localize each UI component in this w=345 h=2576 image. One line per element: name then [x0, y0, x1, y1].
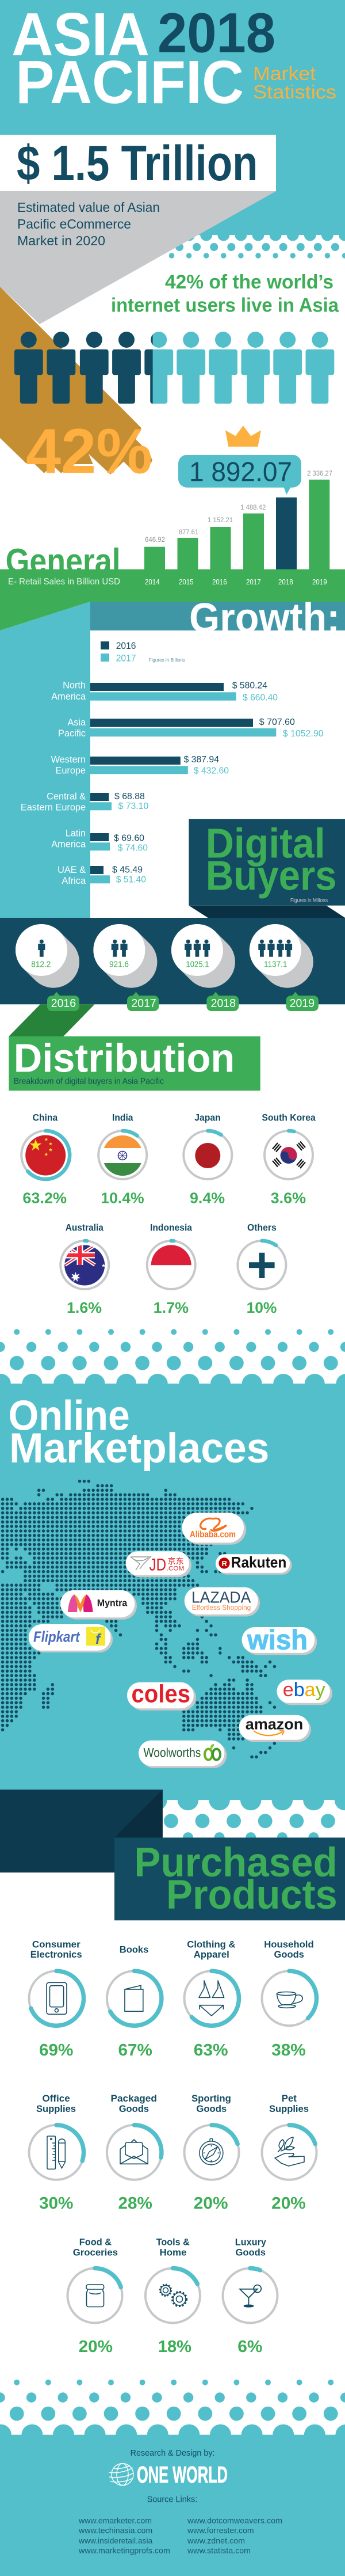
parallelogram under band [9, 1004, 95, 1036]
source links: www.marketingprofs.com [78, 2546, 170, 2555]
source links: www.zdnet.com [187, 2536, 245, 2545]
icon: bikini [199, 1981, 224, 2016]
item: books: Books [120, 1944, 148, 1955]
item: food and groceries: Groceries [73, 2247, 118, 2258]
item: food and groceries: Food & [79, 2236, 112, 2247]
icon: crown [225, 425, 261, 447]
year labels [145, 578, 327, 586]
buyers 2016: 812.2 [31, 959, 51, 969]
bars [144, 480, 329, 570]
item: household goods: Goods [274, 1949, 304, 1960]
title: Asia: ASIA [12, 1, 150, 69]
item: India: India [112, 1113, 133, 1123]
year pill 2018 [206, 992, 239, 1011]
region labels: Western [51, 754, 86, 765]
region labels: Europe [55, 765, 86, 776]
flag: China [25, 1135, 66, 1176]
description text [17, 200, 160, 248]
big 42 percent: 42% [26, 416, 152, 487]
bar values: 1 488.42 [240, 503, 266, 511]
item: South Korea: South Korea [262, 1113, 316, 1123]
year pill 2019: 2019 [290, 997, 315, 1010]
2017 values: $ 432.60 [194, 766, 229, 776]
badge: Myntra [60, 1590, 137, 1620]
badge: Lazada: LAZADA [191, 1588, 251, 1606]
2016 bars [90, 683, 253, 874]
item: tools and home [145, 2236, 200, 2356]
logo: One World [109, 2463, 228, 2488]
scallop and dot pattern [163, 1800, 345, 1838]
heading box [114, 1838, 345, 1920]
icon: hand and plant [275, 2137, 304, 2166]
2016 values: $ 580.24 [232, 681, 267, 691]
panel: header [0, 0, 345, 256]
bar chart: general e-retail sales [0, 469, 345, 630]
badge: Woolworths [139, 1741, 227, 1768]
badge: Alibaba [182, 1513, 246, 1545]
flag: Japan [195, 1143, 220, 1168]
item: luxury goods: Goods [236, 2247, 266, 2258]
title: Pacific: PACIFIC [16, 48, 244, 116]
item: sporting goods: Goods [196, 2103, 227, 2114]
subtitle: Market Statistics [253, 63, 336, 102]
item: Japan: 9.4% [190, 1189, 225, 1206]
item: Indonesia: 1.7% [154, 1299, 189, 1316]
heading band [90, 602, 345, 630]
heading: 42 percent of internet users [111, 271, 339, 317]
source links [78, 2516, 282, 2555]
icon: gears [160, 2285, 187, 2307]
item: office supplies: Office [43, 2093, 70, 2104]
item: pet supplies [262, 2093, 316, 2213]
item: books: 67% [118, 2041, 152, 2060]
description text: Market in 2020 [17, 233, 105, 248]
2017 values: $ 73.10 [118, 801, 148, 811]
heading: Growth: Growth: [189, 595, 340, 641]
badge: Myntra: Myntra [97, 1597, 128, 1608]
heading: Digital Buyers [206, 820, 337, 899]
source links: www.statista.com [187, 2546, 251, 2555]
badge: Woolworths: Woolworths [144, 1746, 201, 1760]
year pill 2019 [286, 992, 319, 1011]
item: consumer electronics: Consumer [32, 1939, 80, 1950]
item: household goods: 38% [271, 2041, 306, 2060]
2017 values: $ 51.40 [116, 875, 146, 884]
flag: India [103, 1135, 141, 1176]
item: packaged goods [107, 2093, 162, 2213]
year labels: 2019 [312, 578, 327, 586]
source links: www.techinasia.com [78, 2526, 152, 2535]
dark band [0, 918, 345, 1004]
dot pattern [0, 1332, 345, 1384]
item: South Korea: 3.6% [271, 1189, 306, 1206]
badge: eBay [277, 1679, 332, 1705]
item: clothing and apparel [184, 1939, 239, 2060]
heading: Online Marketplaces [8, 1392, 269, 1472]
item: luxury goods: Luxury [235, 2236, 267, 2247]
legend [101, 640, 185, 664]
icon: cocktail [240, 2285, 261, 2307]
heading: General: General [6, 542, 121, 580]
2016 values: $ 387.94 [184, 755, 219, 765]
item: clothing and apparel: Clothing & [187, 1939, 236, 1950]
band caption: E- Retail Sales in Billion USD [8, 577, 120, 587]
credit line: Research & Design by: [131, 2448, 215, 2458]
gray description panel [0, 191, 276, 324]
heading: 42 percent of internet users: internet users live in Asia [111, 295, 339, 317]
badge: JD [125, 1551, 191, 1578]
description text: Estimated value of Asian [17, 200, 160, 215]
heading box [9, 1036, 260, 1091]
badge: Rakuten: Rakuten [231, 1553, 286, 1571]
buyers 2019: 1137.1 [264, 959, 287, 969]
bar values: 1 152.21 [208, 516, 233, 524]
title: 2018: 2018 [158, 2, 275, 64]
item: pet supplies: Supplies [269, 2103, 309, 2114]
item: household goods: Household [264, 1939, 314, 1950]
heading: Online Marketplaces: Online [8, 1392, 130, 1439]
teal side column [0, 602, 90, 918]
year pill 2018: 2018 [211, 997, 236, 1010]
heading box [189, 819, 345, 906]
item: Australia [60, 1222, 109, 1316]
region labels: Central & [47, 791, 86, 801]
buyers 2018 [171, 924, 223, 976]
badge: Amazon [239, 1715, 311, 1742]
region labels: Africa [62, 876, 86, 886]
callout: 1 892.07 [178, 455, 301, 495]
year pill 2017: 2017 [131, 997, 156, 1010]
bar values: 2 336.27 [307, 469, 332, 477]
heading: Online Marketplaces: Marketplaces [9, 1425, 269, 1472]
year pill 2016 [47, 992, 79, 1011]
panel: growth [0, 595, 345, 918]
year labels: 2015 [179, 578, 194, 586]
sources heading: Source Links: [147, 2495, 197, 2505]
badge: Flipkart [29, 1624, 113, 1652]
logo: One World: ONE WORLD [137, 2463, 228, 2488]
scallop and dot pattern [171, 235, 345, 256]
heading: 42 percent of internet users: 42% of the world’s [165, 271, 334, 293]
year pill 2016: 2016 [51, 997, 76, 1010]
item: clothing and apparel: Apparel [194, 1949, 229, 1960]
item: luxury goods: 6% [237, 2338, 263, 2356]
region labels: Eastern Europe [21, 802, 86, 812]
region labels: UAE & [57, 865, 86, 875]
year labels: 2016 [212, 578, 227, 586]
panel: online marketplaces [0, 1332, 345, 1800]
legend: 2017 [116, 653, 136, 664]
heading: Digital Buyers: Buyers [206, 853, 337, 899]
region labels: America [51, 692, 86, 702]
item: China: 63.2% [22, 1189, 67, 1206]
green band [0, 569, 345, 630]
flag: Australia [64, 1245, 105, 1285]
box shadow [189, 906, 345, 918]
badge: Coles: coles [131, 1680, 190, 1708]
flag: South Korea [273, 1141, 305, 1168]
bar values [145, 469, 332, 544]
buyers 2017: 921.6 [109, 959, 129, 969]
bar values: 877.61 [179, 528, 198, 536]
badge: JD: .COM [167, 1566, 184, 1572]
badge: JD: 京东 [168, 1556, 184, 1567]
item: books [107, 1944, 162, 2060]
2016 values: $ 68.88 [114, 792, 145, 801]
heading: Purchased Products: Purchased [134, 1840, 338, 1886]
subtitle: Market Statistics: Statistics [253, 81, 336, 102]
item: office supplies: 30% [39, 2194, 74, 2213]
badge: JD: JD [150, 1556, 166, 1575]
item: South Korea [262, 1113, 316, 1206]
panel: distribution [9, 1036, 316, 1316]
panel: footer [0, 2383, 345, 2576]
2017 values [116, 693, 324, 884]
legend: 2016 [116, 640, 136, 651]
item: pet supplies: 20% [271, 2194, 306, 2213]
region labels: Asia [67, 717, 86, 728]
icon: phone [47, 1982, 67, 2014]
bar values: 646.92 [145, 535, 165, 544]
region labels: Latin [66, 828, 86, 838]
source links: www.insideretail.asia [78, 2536, 152, 2545]
icon: plus [249, 1253, 275, 1278]
buyers 2016 [0, 0, 67, 976]
item: tools and home: Home [160, 2247, 186, 2258]
source links: www.forrester.com [187, 2526, 254, 2535]
item: luxury goods [223, 2236, 277, 2356]
2016 values: $ 707.60 [259, 717, 295, 727]
buyers 2019 [250, 924, 301, 976]
item: packaged goods: Goods [119, 2103, 149, 2114]
year labels: 2017 [246, 578, 261, 586]
item: sporting goods: 20% [194, 2194, 228, 2213]
item: Australia: 1.6% [67, 1299, 102, 1316]
region labels: America [51, 839, 86, 849]
year labels: 2018 [278, 578, 293, 586]
subtitle: Market Statistics: Market [253, 63, 316, 84]
badge: Rakuten: R [222, 1559, 228, 1568]
item: Indonesia: Indonesia [150, 1222, 193, 1233]
2017 bars [90, 692, 276, 883]
pictogram: ten people [14, 332, 334, 404]
description text: Pacific eCommerce [17, 216, 131, 231]
icon: compass [200, 2138, 223, 2165]
icon: ruler and pencil [47, 2136, 65, 2169]
badge: Flipkart: Flipkart [33, 1628, 80, 1646]
region labels [21, 681, 86, 886]
long shadow of 42 percent [0, 287, 152, 474]
item: household goods [262, 1939, 316, 2060]
badge: Flipkart: f [95, 1631, 102, 1647]
item: tools and home: Tools & [156, 2236, 190, 2247]
panel: 1.5 trillion value [0, 135, 276, 324]
buyers 2017 [93, 924, 145, 976]
legend: Figures in Billions [149, 657, 185, 663]
item: consumer electronics [29, 1939, 84, 2060]
item: Australia: Australia [66, 1222, 104, 1233]
badge: Wish: wish [247, 1625, 308, 1655]
heading: Digital Buyers: Digital [206, 820, 325, 867]
shadow fold [114, 1789, 163, 1838]
icon: envelope [120, 2140, 148, 2164]
dotted map [3, 1481, 274, 1757]
2017 values: $ 74.60 [118, 844, 148, 853]
item: China [21, 1113, 70, 1206]
flag: Indonesia [151, 1245, 191, 1265]
item: Japan [183, 1113, 232, 1206]
item: India: 10.4% [101, 1189, 144, 1206]
item: packaged goods: 28% [118, 2194, 152, 2213]
item: Others: 10% [247, 1299, 277, 1316]
2017 values: $ 660.40 [243, 693, 278, 703]
item: consumer electronics: 69% [39, 2041, 74, 2060]
badge: Lazada: Effortless Shopping [192, 1604, 251, 1612]
2016 values: $ 69.60 [114, 834, 144, 844]
item: food and groceries: 20% [79, 2338, 113, 2356]
item: consumer electronics: Electronics [30, 1949, 82, 1960]
heading: Purchased Products [134, 1840, 338, 1918]
item: office supplies: Supplies [36, 2103, 76, 2114]
2016 values [112, 681, 295, 875]
item: India [98, 1113, 147, 1206]
panel: purchased products [0, 1789, 345, 2356]
dark shadow block [0, 1789, 163, 1872]
item: Others: Others [247, 1222, 277, 1233]
dot pattern [0, 2383, 345, 2435]
item: office supplies [29, 2093, 84, 2213]
headline number: $ 1.5 Trillion [17, 136, 258, 191]
icon: book [125, 1985, 143, 2011]
item: sporting goods: Sporting [191, 2093, 231, 2104]
icon: jar [86, 2285, 104, 2307]
buyers 2018: 1025.1 [186, 959, 209, 969]
icon: cup [277, 1992, 302, 2008]
item: food and groceries [68, 2236, 122, 2356]
badge: Amazon: amazon [246, 1715, 303, 1732]
note: Figures in Milions [290, 898, 328, 903]
source links: www.dotcomweavers.com [187, 2516, 282, 2525]
2016 values: $ 45.49 [112, 865, 143, 875]
heading: Distribution: Distribution [14, 1036, 235, 1081]
item: Others [237, 1222, 286, 1316]
subheading: Breakdown of digital buyers in Asia Pacific [14, 1076, 164, 1086]
item: packaged goods: Packaged [110, 2093, 157, 2104]
source links: www.emarketer.com [78, 2516, 152, 2525]
region labels: Pacific [58, 728, 86, 739]
heading: Purchased Products: Products [166, 1872, 338, 1918]
item: Indonesia [147, 1222, 195, 1316]
year labels: 2014 [145, 578, 160, 586]
badge: eBay: ebay [283, 1679, 325, 1701]
item: clothing and apparel: 63% [194, 2041, 228, 2060]
badge: Lazada [185, 1587, 260, 1617]
callout: 1 892.07: 1 892.07 [189, 457, 292, 487]
panel: digital buyers [0, 0, 345, 1036]
badge: Alibaba: Alibaba.com [190, 1530, 236, 1540]
item: Japan: Japan [194, 1113, 221, 1123]
badge: Rakuten [216, 1553, 292, 1575]
year pill 2017 [127, 992, 159, 1011]
2017 values: $ 1052.90 [283, 729, 324, 739]
item: tools and home: 18% [158, 2338, 191, 2356]
item: sporting goods [184, 2093, 239, 2213]
item: pet supplies: Pet [282, 2093, 297, 2104]
item: China: China [33, 1113, 58, 1123]
region labels: North [63, 681, 86, 691]
